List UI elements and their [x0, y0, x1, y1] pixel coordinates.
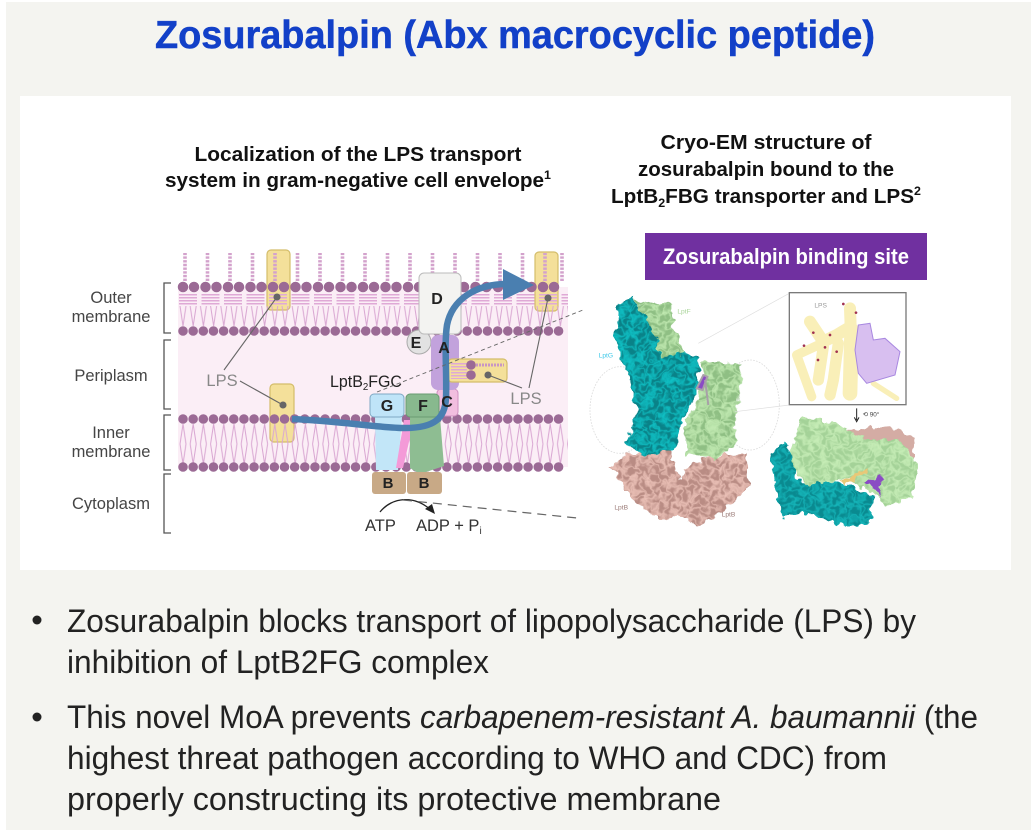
LptF green density: [635, 300, 742, 460]
labels on transport path: C: [441, 394, 453, 411]
ATP hydrolysis arrow: i: [479, 526, 482, 537]
ATP hydrolysis arrow: ATP: [365, 517, 396, 535]
protein: G: [370, 394, 404, 417]
bullet 2: [32, 699, 978, 817]
callout: binding site label: Zosurabalpin binding site: [663, 244, 909, 269]
callout: binding site label: [645, 233, 927, 280]
brackets and region labels: membrane: [72, 443, 150, 461]
bullet 1: [32, 603, 916, 680]
subunit labels: [599, 308, 736, 519]
membrane layers: [178, 253, 568, 467]
cryo-EM structure figure: [590, 293, 919, 527]
LPS in transit: [448, 359, 507, 382]
detergent micelle outline: [590, 360, 779, 453]
label: LptB2FGC: LptB: [330, 373, 364, 391]
rotation marker: ⟲ 90°: [863, 410, 880, 418]
heading: cryo-EM structure: 2: [914, 184, 921, 198]
title: Zosurabalpin (Abx macrocyclic peptide): [155, 14, 875, 57]
subunit labels: LptB: [722, 512, 736, 519]
label: LptB2FGC: FGC: [368, 373, 402, 391]
protein: B dimer: [372, 472, 442, 494]
inset: LPS density close-up: LPS: [814, 303, 827, 310]
membrane background: [178, 287, 568, 467]
arrow: LPS transport path: [292, 269, 534, 428]
subunit labels: LptF: [677, 308, 691, 315]
label: LptB2FGC: 2: [363, 382, 369, 393]
ATP hydrolysis arrow: ADP + P: [416, 517, 479, 535]
bullet 2: highest threat pathogen according to WHO and CDC) from: [67, 740, 887, 776]
heading: LPS transport localization: [165, 144, 551, 192]
subunit labels: LptB: [614, 504, 629, 511]
protein: B dimer: B: [383, 475, 394, 492]
bullet 1: Zosurabalpin blocks transport of lipopolysaccharide (LPS) by: [67, 603, 916, 639]
heading: cryo-EM structure: [611, 132, 921, 210]
zosurabalpin ligand: [697, 375, 708, 405]
LPS boxes: [267, 250, 558, 442]
LptB subunits: [612, 450, 748, 527]
dashed zoom guide lines: [377, 310, 583, 518]
heading: cryo-EM structure: Cryo-EM structure of: [660, 132, 872, 154]
protein: D: D: [431, 291, 443, 308]
protein: D: [419, 273, 461, 334]
subunit labels: LptG: [599, 352, 613, 359]
labels on transport path: A: [438, 340, 450, 357]
protein: F: [406, 394, 439, 417]
brackets and region labels: Cytoplasm: [72, 495, 150, 513]
brackets and region labels: Outer: [90, 289, 132, 307]
brackets and region labels: Periplasm: [74, 367, 148, 385]
protein: C: [437, 389, 458, 416]
protein: E: E: [411, 335, 422, 352]
bullet 2: This novel MoA prevents carbapenem-resistant A. baumannii (the: [67, 699, 978, 735]
protein: F: F: [418, 398, 428, 415]
brackets and region labels: membrane: [72, 308, 150, 326]
diagram: cell envelope LPS transport: [72, 250, 583, 537]
labels on transport path: [438, 340, 453, 411]
heading: cryo-EM structure: FBG transporter and LPS: [665, 186, 914, 208]
inset: LPS density close-up: [789, 293, 906, 405]
heading: LPS transport localization: 1: [544, 168, 551, 182]
LPS leader lines and labels: [206, 294, 551, 408]
protein: transmembrane domains: [375, 417, 444, 474]
heading: cryo-EM structure: zosurabalpin bound to the: [638, 159, 894, 181]
bullet list: [32, 603, 978, 817]
rotation marker: [854, 408, 880, 422]
brackets and region labels: Inner: [92, 424, 130, 442]
heading: LPS transport localization: system in gram-negative cell envelope: [165, 170, 531, 192]
protein: A: [431, 335, 459, 390]
heading: cryo-EM structure: LptB: [611, 186, 657, 208]
zoom guide lines: [698, 293, 789, 412]
protein: G: G: [381, 398, 393, 415]
panel: white figure panel: [20, 96, 1011, 570]
brackets and region labels: [72, 283, 171, 533]
bullet 1: inhibition of LptB2FG complex: [67, 644, 489, 680]
LptG teal density: [615, 298, 700, 457]
LPS leader lines and labels: LPS: [510, 390, 542, 408]
protein: E: [407, 330, 431, 354]
protein: B dimer: B: [419, 475, 430, 492]
bullet 2: properly constructing its protective membrane: [67, 781, 721, 817]
heading: LPS transport localization: Localization of the LPS transport: [194, 144, 522, 166]
heading: cryo-EM structure: 2: [658, 196, 665, 210]
ATP hydrolysis arrow: [365, 500, 482, 537]
rotated view density: [770, 417, 919, 527]
LPS leader lines and labels: LPS: [206, 372, 238, 390]
